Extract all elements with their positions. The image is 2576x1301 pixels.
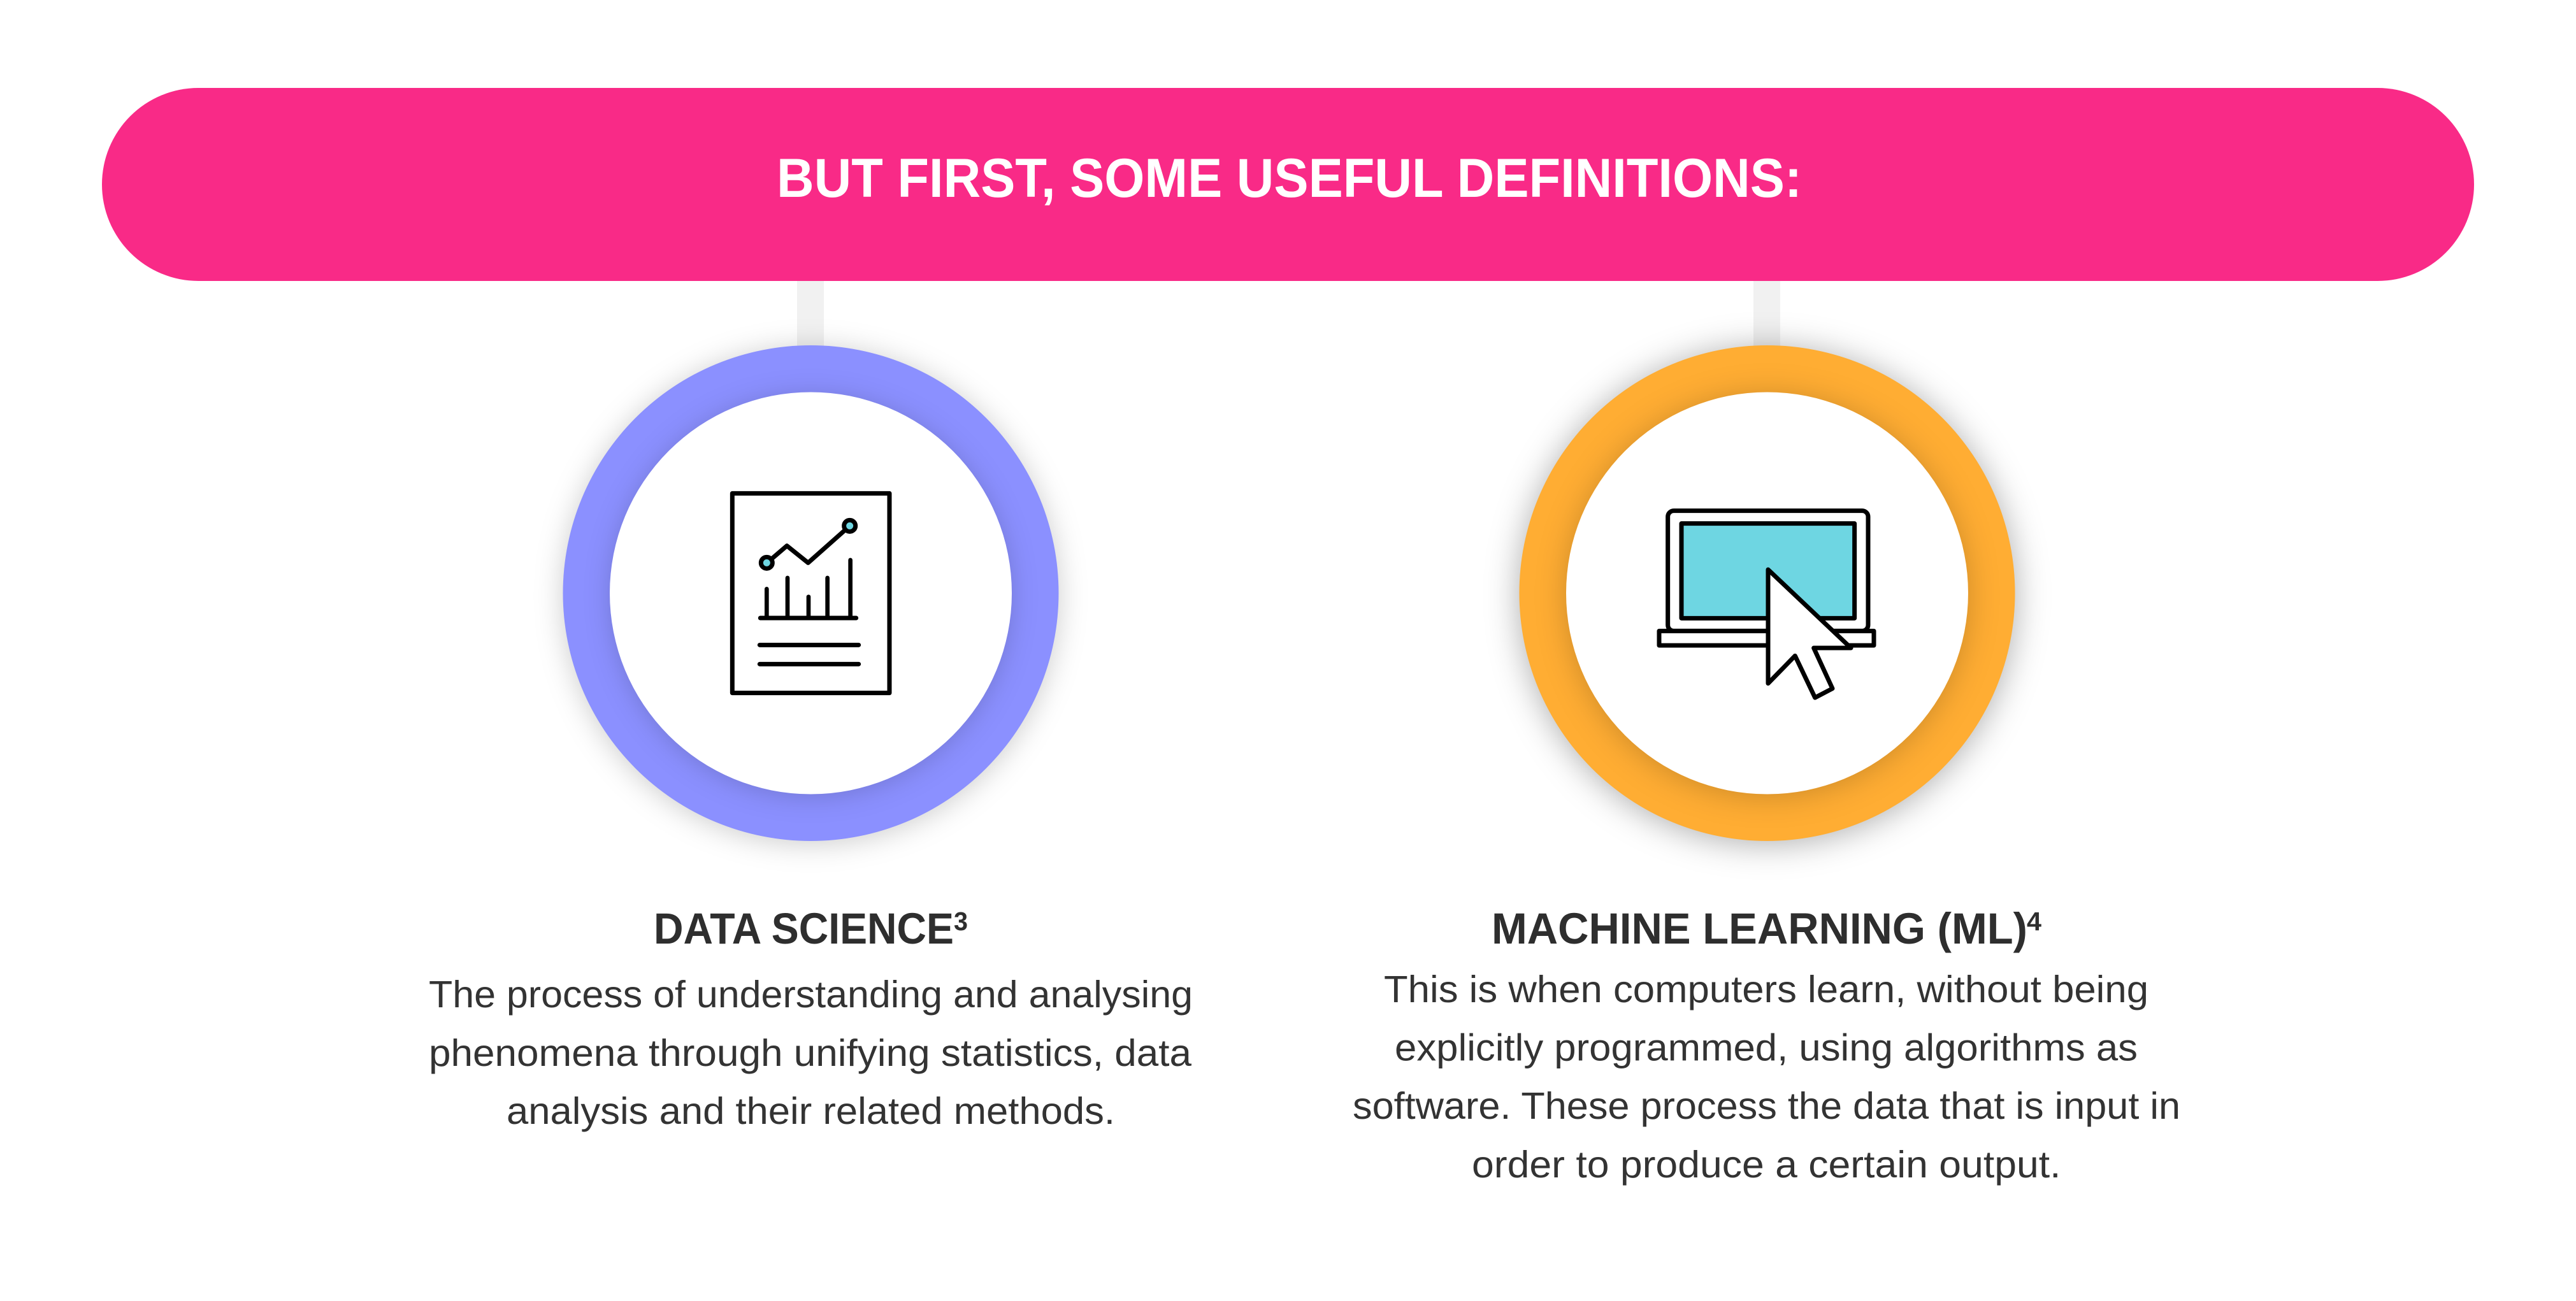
panel: data science xyxy=(429,345,1193,1132)
purple ring xyxy=(563,345,1059,841)
superscript: 4: 4 xyxy=(2027,907,2041,936)
text: data science definition: analysis and their related methods. xyxy=(507,1090,1115,1132)
panel: machine learning xyxy=(1353,345,2180,1186)
white inner circle xyxy=(610,392,1012,794)
orange ring xyxy=(1519,345,2015,841)
superscript: 3: 3 xyxy=(954,907,968,936)
connector: banner to data science circle xyxy=(797,281,824,351)
heading: machine learning: MACHINE LEARNING (ML) xyxy=(1492,904,2027,953)
icon: laptop with cursor xyxy=(1659,511,1874,698)
heading: data science: DATA SCIENCE xyxy=(654,904,954,953)
text: machine learning definition: software. These process the data that is input in xyxy=(1353,1085,2180,1127)
text: machine learning definition: This is when computers learn, without being xyxy=(1384,968,2148,1010)
white inner circle xyxy=(1566,392,1968,794)
icon: report with chart xyxy=(732,493,889,693)
text: machine learning definition xyxy=(1353,968,2180,1186)
title: BUT FIRST, SOME USEFUL DEFINITIONS: xyxy=(777,148,1802,209)
connector: banner to machine learning circle xyxy=(1753,281,1780,351)
text: data science definition xyxy=(429,974,1193,1132)
text: machine learning definition: order to produce a certain output. xyxy=(1472,1144,2061,1186)
text: data science definition: The process of understanding and analysing xyxy=(429,974,1193,1016)
text: data science definition: phenomena through unifying statistics, data xyxy=(429,1032,1191,1074)
text: machine learning definition: explicitly programmed, using algorithms as xyxy=(1395,1027,2138,1069)
banner xyxy=(102,88,2474,281)
